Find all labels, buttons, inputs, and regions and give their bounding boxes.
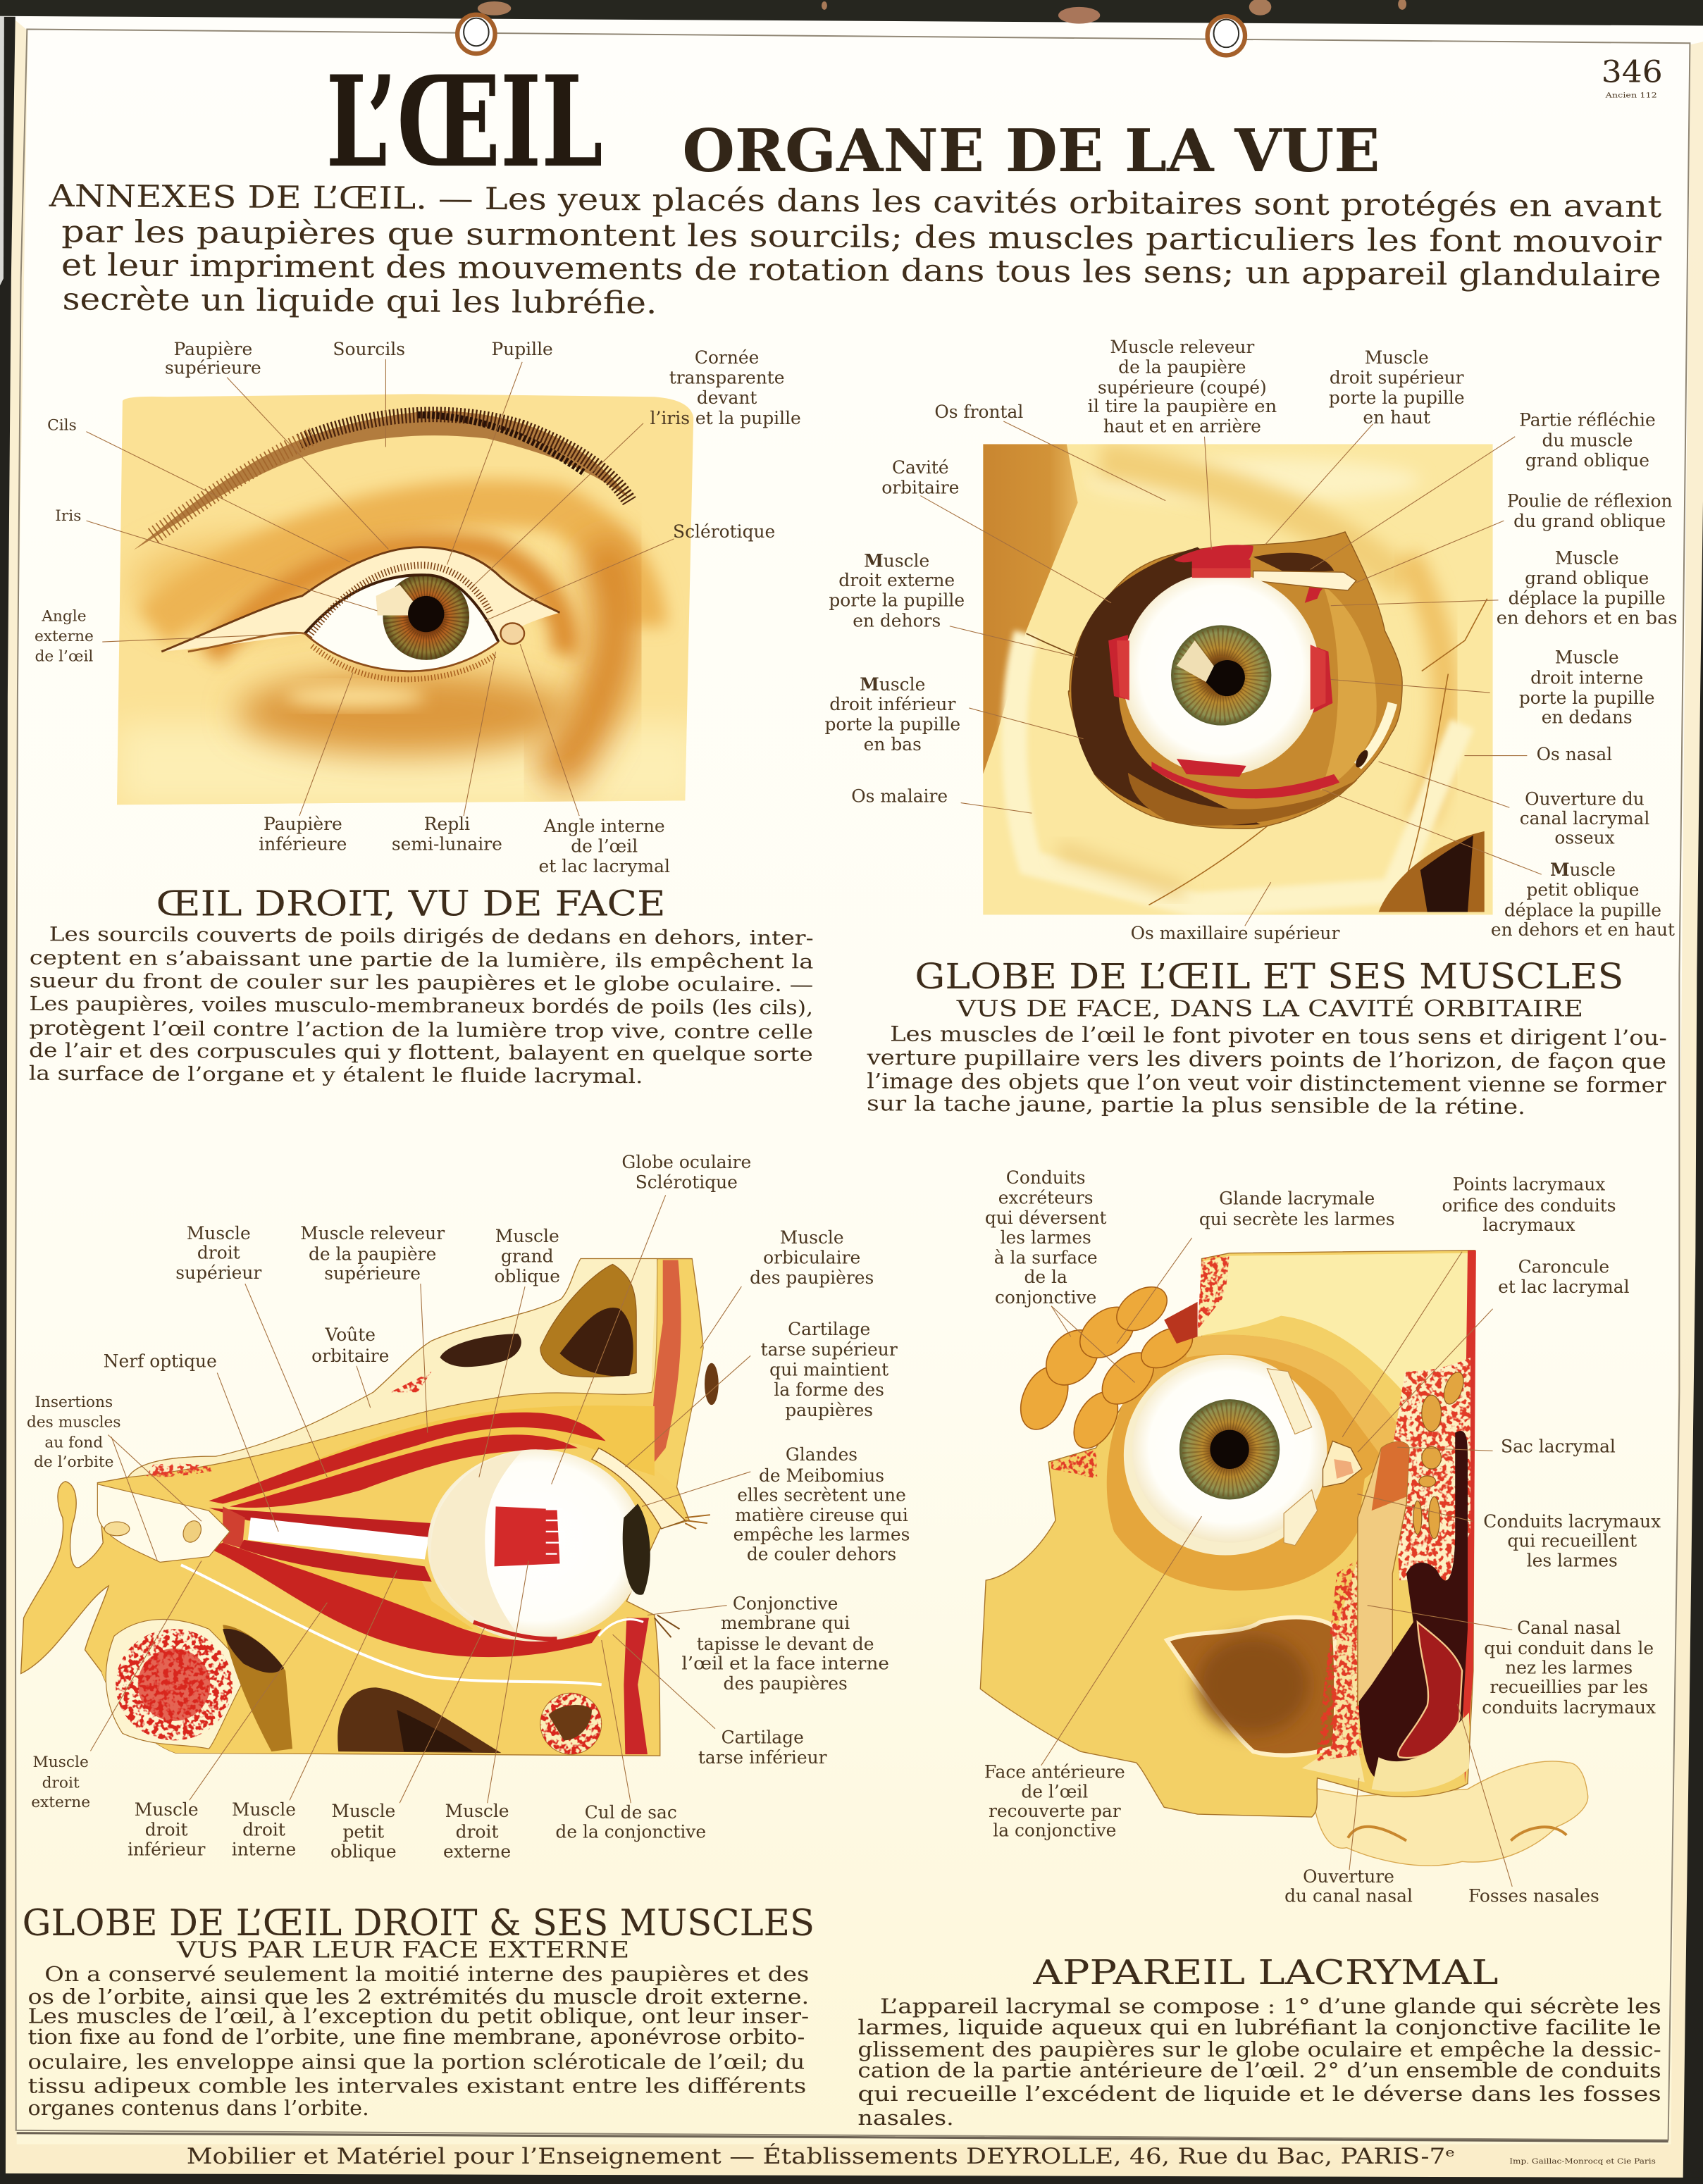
label: Muscle droit supérieur: supérieur [175, 1262, 261, 1283]
label: Muscle droit externe: porte la pupille [829, 590, 965, 611]
illustration: lacrymal apparatus section [980, 1251, 1588, 1866]
eyebrow [134, 411, 629, 550]
label: Caroncule: et lac lacrymal [1498, 1277, 1630, 1297]
label: Muscle droit supérieur: Muscle [1365, 347, 1429, 368]
label: Points lacrymaux: Points lacrymaux [1453, 1174, 1605, 1195]
label: Glande lacrymale: qui secrète les larmes [1199, 1209, 1395, 1229]
text block: tion fixe au fond de l’orbite, une fine membrane, aponévrose orbito- [28, 2025, 805, 2049]
label: Conduits lacrymaux: les larmes [1527, 1550, 1618, 1570]
label: Insertions des muscles: des muscles [27, 1414, 121, 1432]
text block: ceptent en s’abaissant une partie de la lumière, ils empêchent la [30, 946, 814, 973]
label: Paupière inférieure: inférieure [259, 834, 347, 855]
leader lines [87, 359, 674, 816]
globe [1122, 572, 1320, 776]
label: Partie réfléchie: Partie réfléchie [1519, 410, 1656, 430]
illustration: side section of the orbit [21, 1259, 719, 1756]
leader lines [1041, 1238, 1512, 1887]
label: Cornée: l’iris et la pupille [650, 408, 801, 428]
icon: left eyelet [457, 15, 495, 54]
heading: GLOBE DE L’ŒIL ET SES MUSCLES [915, 956, 1623, 997]
label: Paupière inférieure: Paupière [264, 814, 342, 834]
label: Muscle grand oblique: déplace la pupille [1509, 588, 1666, 609]
label: Partie réfléchie: du muscle [1542, 430, 1633, 450]
label: Canal nasal: recueillies par les [1490, 1677, 1648, 1697]
label: Face antérieure: la conjonctive [993, 1820, 1116, 1841]
label: Conduits excréteurs: à la surface [994, 1247, 1098, 1267]
label: Partie réfléchie: grand oblique [1525, 450, 1649, 471]
label: Face antérieure: de l’œil [1021, 1781, 1088, 1801]
label: Muscle orbiculaire: Muscle [780, 1227, 844, 1248]
label: Angle externe: Angle [41, 607, 87, 625]
frontal bone [128, 1259, 657, 1477]
muscle: upper muscles [209, 1413, 606, 1508]
label: Cornée: Cornée [695, 347, 759, 368]
globe [428, 1449, 645, 1642]
label: Canal nasal: Canal nasal [1517, 1618, 1621, 1638]
label: Muscle releveur: de la paupière [1118, 357, 1246, 378]
text block: protègent l’œil contre l’action de la lumière trop vive, contre celle [29, 1016, 813, 1043]
heading: APPAREIL LACRYMAL [1032, 1954, 1498, 1992]
heading: GLOBE DE L’ŒIL DROIT & SES MUSCLES [23, 1902, 815, 1944]
text block: tissu adipeux comble les intervales existant entre les différents [28, 2073, 806, 2097]
text block: l’image des objets que l’on veut voir distinctement vienne se former [867, 1069, 1667, 1098]
label: Muscle releveur: supérieure (coupé) [1098, 377, 1267, 397]
label: Points lacrymaux: lacrymaux [1482, 1215, 1575, 1235]
text block: os de l’orbite, ainsi que les 2 extrémités du muscle droit externe. [28, 1985, 809, 2009]
label: Muscle petit oblique: Muscle [1550, 860, 1616, 880]
label: Muscle releveur: Muscle releveur [1110, 337, 1254, 357]
orbicularis muscle [652, 1260, 681, 1462]
label: Muscle droit interne: en dedans [1542, 707, 1633, 728]
label: Poulie de réflexion: Poulie de réflexion [1507, 490, 1673, 511]
label: Cartilage tarse supérieur: Cartilage [788, 1319, 870, 1339]
intro paragraph: ANNEXES DE L’ŒIL. — Les yeux placés dans les cavités orbitaires sont protégés en avant [48, 179, 1662, 225]
label: Muscle grand oblique: oblique [494, 1266, 560, 1286]
old plate number: Ancien 112 [1604, 92, 1657, 99]
text block: cation de la partie antérieure de l’œil. 2° d’un ensemble de conduits [857, 2059, 1661, 2083]
sub-heading: VUS DE FACE, DANS LA CAVITÉ ORBITAIRE [955, 995, 1583, 1022]
muscle: lower long muscle [209, 1543, 602, 1657]
label: Muscle grand oblique: en dehors et en bas [1497, 607, 1678, 628]
label: Cavité orbitaire: orbitaire [881, 478, 959, 498]
label: Muscle droit inférieur: droit inférieur [829, 694, 955, 714]
label: Voûte orbitaire: Voûte [325, 1324, 376, 1345]
label: Globe oculaire: Globe oculaire [621, 1152, 751, 1172]
label: Muscle releveur: Muscle releveur [300, 1223, 445, 1243]
label: Cornée: transparente [669, 367, 784, 387]
label: Muscle droit externe, left: Muscle [32, 1754, 89, 1771]
nasal cavity [1359, 1431, 1468, 1780]
label: Muscle droit interne: interne [232, 1839, 296, 1859]
label: Muscle droit externe: Muscle [864, 550, 929, 571]
upper lid fold [161, 547, 559, 652]
panel: globe de l'œil et ses muscles [824, 337, 1678, 1119]
label: Cartilage tarse supérieur: qui maintient [769, 1360, 888, 1380]
lacrymal gland [1011, 1278, 1199, 1456]
label: Sac lacrymal: Sac lacrymal [1501, 1436, 1616, 1456]
label: Insertions des muscles: au fond [44, 1434, 103, 1451]
label: Cils: Cils [47, 417, 77, 435]
text block: sueur du front de couler sur les paupières et le globe oculaire. — [30, 969, 813, 996]
label: Ouverture du canal nasal: Ouverture [1303, 1866, 1394, 1887]
label: Muscle droit supérieur: porte la pupille [1329, 387, 1465, 408]
label: Cavité orbitaire: Cavité [892, 457, 949, 478]
label: Muscle droit externe: droit [456, 1822, 498, 1842]
orbit apex bone [97, 1484, 230, 1562]
label: Muscle grand oblique: Muscle [495, 1226, 559, 1246]
text block: sur la tache jaune, partie la plus sensible de la rétine. [867, 1091, 1525, 1119]
label: Canal nasal: qui conduit dans le [1484, 1638, 1654, 1658]
label: Points lacrymaux: orifice des conduits [1442, 1195, 1616, 1215]
text block: organes contenus dans l’orbite. [28, 2096, 369, 2120]
label: Conjonctive: tapisse le devant de [697, 1634, 874, 1654]
label: Voûte orbitaire: orbitaire [311, 1346, 389, 1366]
panel: appareil lacrymal [857, 1167, 1661, 2130]
label: Muscle petit oblique: déplace la pupille [1504, 900, 1661, 920]
label: Muscle droit supérieur: en haut [1363, 407, 1430, 428]
label: Muscle droit externe, left: droit [42, 1775, 80, 1792]
label: Angle interne: et lac lacrymal [539, 856, 670, 876]
label: Muscle orbiculaire: des paupières [750, 1267, 874, 1288]
label: Muscle releveur: de la paupière [309, 1244, 436, 1265]
label: Cartilage tarse supérieur: la forme des [774, 1379, 884, 1400]
illustration: eye seen from the front [117, 394, 702, 807]
label: Ouverture du canal lacrymal: osseux [1554, 828, 1615, 848]
label: Muscle petit oblique: Muscle [331, 1801, 395, 1821]
sinus cavities [540, 1264, 636, 1377]
intro paragraph: et leur impriment des mouvements de rotation dans tous les sens; un appareil glandulaire [61, 248, 1661, 294]
label: Muscle droit interne: porte la pupille [1519, 688, 1655, 708]
label: Cornée: devant [697, 387, 757, 408]
label: Conjonctive: l’œil et la face interne [681, 1653, 889, 1674]
eye muscles [1108, 545, 1339, 798]
text block: Les paupières, voiles musculo-membraneux bordés de poils (les cils), [29, 992, 813, 1019]
label: Angle externe: externe [35, 628, 94, 645]
caruncle [1323, 1441, 1362, 1487]
upper lid [592, 1448, 685, 1529]
iris [1179, 1399, 1280, 1499]
orbit fat [216, 1406, 655, 1503]
text block: qui recueille l’excédent de liquide et le déverse dans les fosses [857, 2082, 1661, 2106]
label: Muscle droit supérieur: droit [197, 1243, 240, 1263]
label: Face antérieure: recouverte par [989, 1801, 1121, 1821]
label: Muscle droit supérieur: Muscle [187, 1223, 251, 1243]
label: Muscle droit externe: externe [443, 1841, 511, 1861]
label: Cartilage tarse inférieur: Cartilage [722, 1727, 804, 1747]
label: Repli semi-lunaire: semi-lunaire [392, 834, 502, 855]
text block: glissement des paupières sur le globe oculaire et empêche la dessic- [857, 2037, 1661, 2061]
maxillary sinus [1167, 1618, 1336, 1756]
label: Pupille: Pupille [491, 339, 553, 359]
label: Muscle droit externe: droit externe [838, 570, 955, 590]
label: Muscle grand oblique: grand oblique [1525, 568, 1649, 588]
muscle: rectus externus [209, 1506, 432, 1582]
label: Cartilage tarse supérieur: tarse supérieur [761, 1339, 898, 1360]
sub-heading: VUS PAR LEUR FACE EXTERNE [176, 1938, 629, 1963]
panel: globe de l'œil droit et ses muscles [21, 1152, 910, 2120]
label: Muscle petit oblique: petit [342, 1822, 384, 1842]
label: Canal nasal: nez les larmes [1505, 1657, 1633, 1677]
dark top band with rust spots [0, 0, 1703, 26]
label: Os nasal: Os nasal [1537, 744, 1612, 764]
label: Muscle droit interne: Muscle [232, 1799, 296, 1820]
text block: On a conservé seulement la moitié interne des paupières et des [44, 1962, 809, 1986]
text block: Les muscles de l’œil le font pivoter en tous sens et dirigent l’ou- [890, 1022, 1667, 1050]
label: Muscle droit externe: en dehors [853, 610, 941, 631]
leader lines [920, 421, 1542, 926]
label: Muscle releveur: supérieure [324, 1263, 421, 1284]
label: Conjonctive: Conjonctive [733, 1594, 838, 1614]
label: Muscle droit inférieur: Muscle [860, 674, 925, 695]
panel: œil droit vu de face [29, 339, 814, 1089]
label: Sclérotique: Sclérotique [673, 521, 775, 542]
illustration: eyeball in the orbit [983, 444, 1493, 914]
caruncle [500, 623, 524, 644]
bone silhouette [980, 1251, 1475, 1817]
label: Fosses nasales: Fosses nasales [1468, 1886, 1599, 1906]
label: Muscle petit oblique: en dehors et en haut [1491, 919, 1675, 940]
label: Iris: Iris [55, 507, 81, 525]
globe [1124, 1355, 1327, 1556]
label: Ouverture du canal nasal: du canal nasal [1284, 1886, 1413, 1906]
text block: Les sourcils couverts de poils dirigés de dedans en dehors, inter- [49, 922, 814, 950]
label: Paupière supérieure: supérieure [165, 358, 261, 378]
label: Insertions des muscles: de l’orbite [34, 1453, 113, 1471]
text block [29, 922, 814, 1089]
text block: oculaire, les enveloppe ainsi que la portion scléroticale de l’œil; du [28, 2050, 805, 2074]
text block [28, 1962, 809, 2120]
text block: L’appareil lacrymal se compose : 1° d’une glande qui sécrète les [880, 1994, 1661, 2018]
label: Muscle droit inférieur: inférieur [128, 1839, 205, 1859]
label: Glandes de Meibomius: Glandes [786, 1444, 857, 1465]
label: Globe oculaire: Sclérotique [636, 1172, 738, 1193]
lower bones [101, 1565, 609, 1754]
label: Muscle droit interne: droit [242, 1820, 285, 1840]
bone silhouette [21, 1259, 703, 1756]
text block: larmes, liquide aqueux qui en lubréfiant la conjonctive facilite le [857, 2015, 1661, 2039]
label: Glandes de Meibomius: elles secrètent une [737, 1484, 906, 1505]
label: Muscle droit inférieur: Muscle [135, 1799, 199, 1820]
label: Poulie de réflexion: du grand oblique [1513, 511, 1666, 531]
label: Conduits excréteurs: conjonctive [995, 1287, 1096, 1308]
plate number: 346 [1602, 55, 1663, 90]
label: Glandes de Meibomius: matière cireuse qui [735, 1505, 908, 1525]
title: L’ŒIL [326, 48, 603, 195]
nasal wall [1302, 1559, 1365, 1782]
iris [1171, 625, 1271, 726]
text block: Les muscles de l’œil, à l’exception du petit oblique, ont leur inser- [28, 2004, 809, 2028]
nose [1312, 1761, 1588, 1866]
label: Conduits excréteurs: Conduits [1006, 1167, 1086, 1188]
intro paragraph: par les paupières que surmontent les sourcils; des muscles particuliers les font mouvoir [61, 214, 1661, 260]
label: Repli semi-lunaire: Repli [424, 814, 470, 834]
text block: nasales. [857, 2106, 954, 2130]
icon: right eyelet [1208, 16, 1245, 55]
label: Conduits excréteurs: de la [1024, 1267, 1067, 1287]
label: Conjonctive: des paupières [724, 1673, 848, 1694]
label: Muscle droit inférieur: porte la pupille [824, 714, 960, 735]
eyeball [305, 565, 499, 679]
orbit [1068, 532, 1402, 829]
label: Glande lacrymale: Glande lacrymale [1219, 1188, 1375, 1208]
label: Cul de sac: Cul de sac [585, 1802, 677, 1823]
label: Angle externe: de l’œil [35, 648, 93, 666]
text block: de l’air et des corpuscules qui y flottent, balayent en quelque sorte [29, 1038, 813, 1066]
label: Angle interne: Angle interne [543, 816, 665, 836]
label: Muscle droit interne: droit interne [1530, 667, 1643, 688]
label: Sourcils: Sourcils [333, 339, 405, 359]
label: Angle interne: de l’œil [571, 836, 638, 856]
heading: ŒIL DROIT, VU DE FACE [156, 883, 666, 924]
label: Insertions des muscles: Insertions [35, 1394, 113, 1411]
label: Paupière supérieure: Paupière [173, 339, 252, 359]
label: Conduits excréteurs: qui déversent [985, 1208, 1107, 1228]
label: Muscle grand oblique: Muscle [1555, 547, 1619, 568]
label: Muscle releveur: haut et en arrière [1103, 416, 1261, 437]
label: Os malaire: Os malaire [851, 786, 948, 806]
label: Os frontal: Os frontal [934, 402, 1023, 422]
label: Ouverture du canal lacrymal: canal lacrymal [1520, 808, 1649, 829]
label: Glandes de Meibomius: empêche les larmes [733, 1525, 910, 1545]
text block [857, 1994, 1661, 2130]
label: Conduits excréteurs: les larmes [1001, 1227, 1091, 1248]
text block: la surface de l’organe et y étalent le fluide lacrymal. [29, 1062, 643, 1088]
label: Ouverture du canal lacrymal: Ouverture du [1525, 788, 1645, 809]
printer credit: Imp. Gaillac-Monrocq et Cie Paris [1509, 2158, 1656, 2166]
label: Cartilage tarse supérieur: paupières [785, 1400, 873, 1420]
label: Canal nasal: conduits lacrymaux [1482, 1697, 1656, 1718]
label: Conduits lacrymaux: Conduits lacrymaux [1483, 1511, 1661, 1532]
label: Muscle petit oblique: oblique [330, 1841, 397, 1861]
label: Cartilage tarse inférieur: tarse inférieur [698, 1747, 827, 1768]
intro paragraph: secrète un liquide qui les lubréfie. [62, 282, 657, 321]
footer publisher line: Mobilier et Matériel pour l’Enseignement — Établissements DEYROLLE, 46, Rue du Bac, PARIS-7ᵉ [187, 2144, 1455, 2169]
lacrymal canal [1358, 1441, 1409, 1706]
label: Face antérieure: Face antérieure [984, 1762, 1125, 1782]
leader lines [90, 1195, 750, 1803]
label: Glandes de Meibomius: de couler dehors [747, 1544, 896, 1564]
text block [866, 1021, 1667, 1119]
label: Os maxillaire supérieur: Os maxillaire supérieur [1131, 923, 1339, 943]
label: Muscle droit inférieur: en bas [864, 734, 922, 755]
label: Nerf optique: Nerf optique [104, 1351, 217, 1372]
label: Muscle petit oblique: petit oblique [1526, 880, 1639, 900]
label: Cul de sac: de la conjonctive [555, 1822, 706, 1842]
label: Conduits excréteurs: excréteurs [998, 1187, 1094, 1208]
label: Muscle droit interne: Muscle [1555, 647, 1619, 668]
label: Muscle droit externe, left: externe [31, 1794, 90, 1811]
label: Glandes de Meibomius: de Meibomius [759, 1465, 884, 1486]
intro paragraph [48, 179, 1662, 328]
fat ring and upper tissue [1107, 1335, 1409, 1591]
subtitle: ORGANE DE LA VUE [682, 116, 1380, 185]
label: Muscle droit externe: Muscle [445, 1801, 509, 1821]
label: Conduits lacrymaux: qui recueillent [1507, 1531, 1637, 1551]
label: Muscle grand oblique: grand [501, 1246, 554, 1267]
label: Muscle releveur: il tire la paupière en [1087, 396, 1277, 416]
label: Muscle droit inférieur: droit [145, 1820, 188, 1840]
label: Muscle orbiculaire: orbiculaire [763, 1247, 860, 1267]
label: Conjonctive: membrane qui [721, 1613, 850, 1633]
label: Muscle droit supérieur: droit supérieur [1330, 367, 1464, 387]
label: Caroncule: Caroncule [1518, 1256, 1609, 1277]
text block: verture pupillaire vers les divers points de l’horizon, de façon que [866, 1045, 1666, 1074]
pulley tendon [1253, 571, 1356, 590]
